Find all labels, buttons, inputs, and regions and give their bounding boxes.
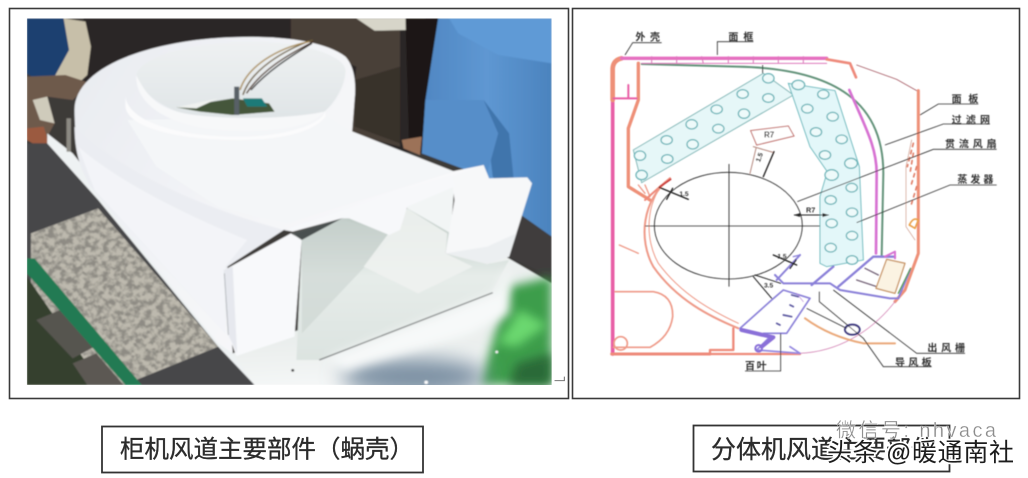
part labels: R7 (806, 205, 815, 214)
part labels: 面板 (952, 93, 978, 106)
casing outline (612, 57, 918, 354)
worker trousers (422, 18, 552, 237)
return mark (555, 377, 564, 381)
wires (240, 40, 313, 95)
speckled mat (31, 208, 218, 385)
photo: volute air duct of cabinet unit (27, 18, 564, 395)
panel: photo frame (10, 8, 568, 398)
watermark: Toutiao account: 头条 @暖通南社 (827, 439, 1014, 467)
left leg of outlet (227, 233, 302, 356)
cross-flow fan (645, 164, 820, 287)
green reflection and shadow (480, 277, 552, 385)
panel: cross-section diagram frame (572, 8, 1020, 398)
part labels: 1.5 (777, 253, 787, 260)
left worker (27, 18, 71, 80)
part labels: 3.5 (764, 282, 774, 289)
part labels: 过滤网 (952, 113, 990, 126)
dimension marks (659, 126, 828, 298)
floor (27, 143, 255, 385)
top panel ribs (642, 57, 827, 63)
top face of duct (351, 130, 454, 172)
outlet and louvers (740, 252, 911, 353)
white base plate (47, 133, 552, 385)
part labels: 1.5 (755, 152, 765, 163)
evaporator coil (633, 73, 863, 267)
part labels: 蒸发器 (957, 173, 993, 186)
diagram: split unit air duct cross-section (612, 30, 997, 372)
part labels: 导风板 (895, 356, 932, 369)
part labels: 贯流风扇 (945, 138, 997, 151)
green strip (27, 258, 142, 385)
screws (67, 118, 71, 152)
part labels: 外壳 (635, 31, 660, 44)
part labels (635, 30, 997, 372)
dark tiles (27, 277, 88, 385)
caption: cabinet unit volute (102, 426, 423, 472)
motor (176, 98, 275, 115)
back wall, dark shadows (84, 18, 440, 152)
bowl opening (150, 58, 345, 118)
mouth interior (293, 208, 509, 360)
leader lines (625, 42, 997, 371)
caption: split unit air duct (694, 426, 950, 472)
part labels: 1.5 (679, 191, 689, 198)
notch behind lip (406, 186, 454, 232)
part labels: 出风栅 (927, 341, 965, 354)
thin line on plate (319, 293, 493, 360)
part labels: 面框 (728, 30, 753, 43)
watermark: Toutiao account: 头条 @暖通南社 (827, 439, 1014, 467)
part labels: 百叶 (745, 360, 767, 372)
volute body (75, 37, 484, 353)
caption: cabinet unit volute: 柜机风道主要部件（蜗壳） (120, 436, 414, 464)
part labels: R7 (764, 130, 775, 139)
right flange (445, 165, 532, 264)
collar (126, 102, 144, 120)
watermark: WeChat account: 微信号: nhvaca (836, 419, 997, 442)
duct front lip (284, 194, 414, 235)
caption: split unit air duct: 分体机风道主要部件 (711, 436, 936, 464)
